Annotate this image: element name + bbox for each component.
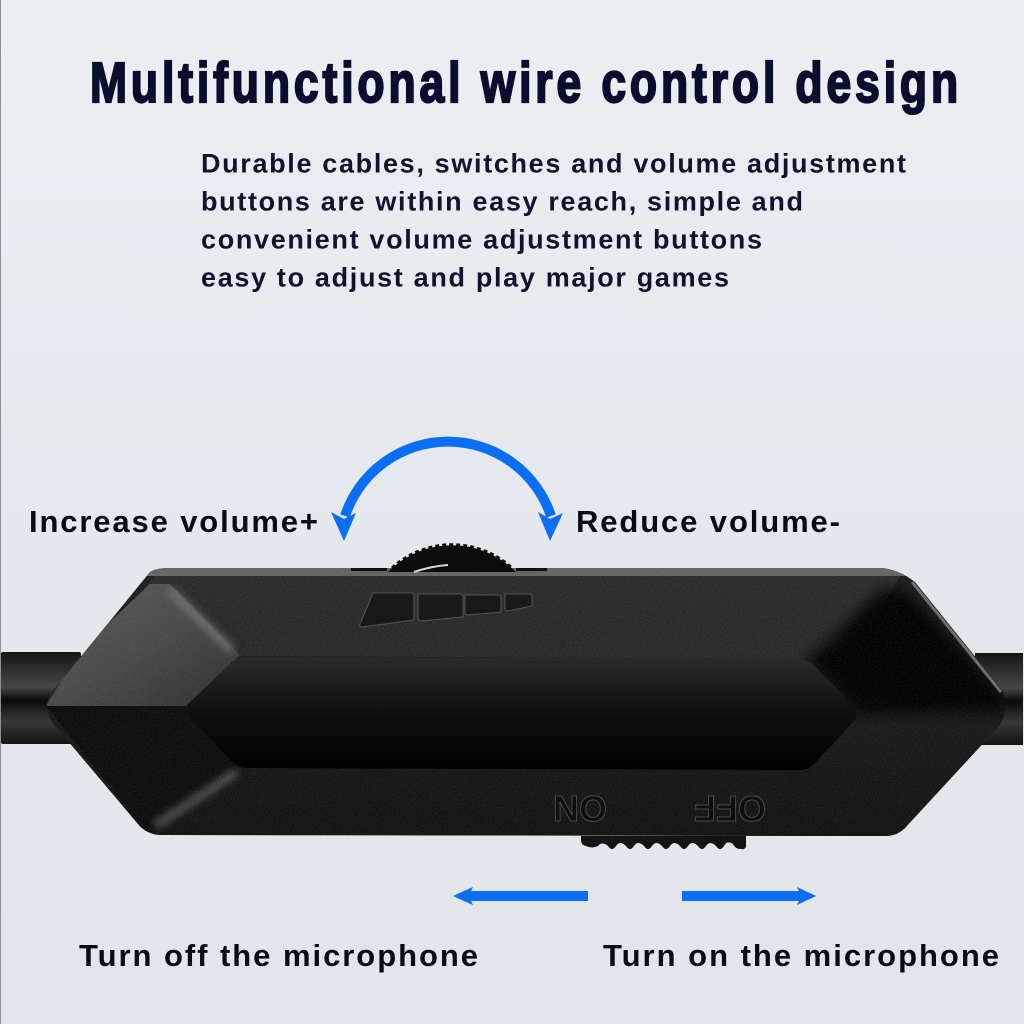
description text block: buttons are within easy reach, simple and — [201, 186, 803, 216]
description text block: convenient volume adjustment buttons — [201, 224, 762, 254]
notches beside the wheel — [351, 568, 387, 571]
embossed ON label: ON — [553, 788, 607, 829]
arrow: slide right — [682, 887, 816, 905]
label: increase volume: Increase volume+ — [29, 504, 318, 539]
title: Multifunctional wire control design — [90, 51, 958, 114]
inline control body — [40, 568, 1010, 840]
central recess — [186, 657, 856, 770]
label: turn off microphone: Turn off the microphone — [79, 938, 478, 973]
cable: right — [975, 653, 1023, 745]
volume level indicator slots — [360, 593, 532, 627]
body shading facets — [40, 568, 1010, 840]
embossed OFF label: OFF — [694, 788, 766, 829]
volume wheel — [388, 545, 516, 572]
cable: left — [1, 652, 81, 744]
icon: curved double-headed volume arrow — [331, 442, 563, 541]
microphone slide switch — [581, 836, 746, 849]
arrow: slide left — [453, 887, 588, 905]
label: reduce volume: Reduce volume- — [576, 504, 840, 539]
description text block: easy to adjust and play major games — [201, 262, 729, 292]
description text block: Durable cables, switches and volume adjustment — [201, 148, 906, 178]
body silhouette — [47, 568, 1006, 836]
description text block — [201, 148, 906, 292]
label: turn on microphone: Turn on the microphone — [603, 938, 999, 973]
